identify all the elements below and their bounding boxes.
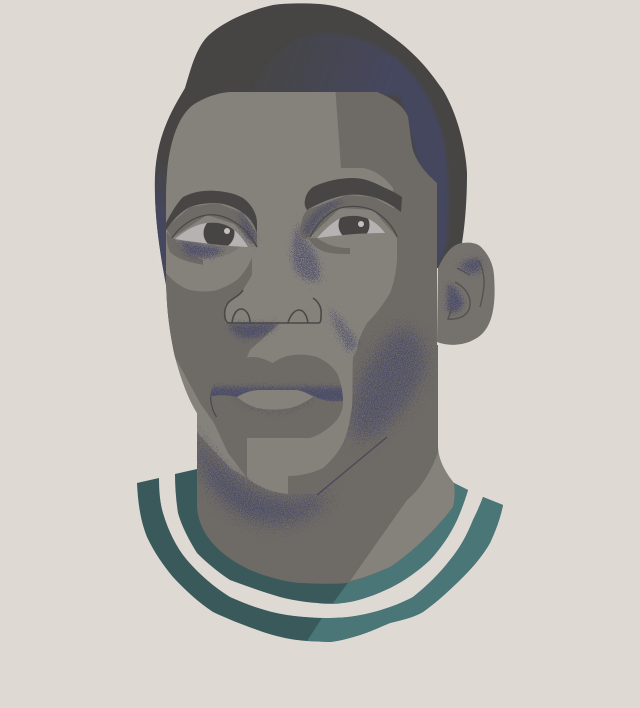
collar: outer band bbox=[137, 478, 503, 642]
hair: blue sheen top bbox=[290, 34, 449, 266]
hair bbox=[150, 0, 470, 300]
ear: inner grain bbox=[445, 280, 466, 316]
left eye: highlight bbox=[224, 228, 230, 234]
right eye: white bbox=[317, 216, 385, 238]
right eye bbox=[300, 178, 402, 254]
mouth opening bbox=[237, 390, 313, 410]
chin shadow grain bbox=[190, 410, 335, 529]
left eyebrow bbox=[166, 191, 257, 233]
face: shaded left cheek bbox=[160, 257, 280, 478]
left eye: lower crescent bbox=[167, 232, 203, 265]
hair: blue sheen left bbox=[154, 177, 166, 285]
face: light plane bbox=[150, 85, 397, 494]
collar: outer band lit part bbox=[307, 497, 503, 642]
right eyebrow bbox=[305, 178, 402, 212]
neck bbox=[197, 330, 455, 584]
nostril left bbox=[232, 309, 250, 323]
nose bbox=[225, 290, 321, 323]
upper lip shadow grain bbox=[200, 386, 350, 404]
right eye: lid shadow bbox=[300, 195, 401, 240]
left eye: lid shadow bbox=[166, 203, 257, 248]
mouth opening shadow bbox=[233, 396, 317, 412]
left eye: lid grain bbox=[232, 208, 258, 248]
collar: inner band lit part bbox=[333, 483, 468, 603]
lip left line bbox=[210, 397, 216, 417]
left eye bbox=[166, 191, 258, 265]
right eye: lower crescent bbox=[308, 238, 350, 254]
face: cheek shadow grain bbox=[328, 302, 362, 356]
lips shape bbox=[210, 355, 343, 438]
face bbox=[166, 92, 438, 500]
left eye: under-eye grain bbox=[176, 238, 228, 259]
jaw line bbox=[317, 437, 387, 495]
lips and chin bbox=[200, 355, 350, 438]
face: nose shadow grain bbox=[226, 322, 282, 340]
portrait illustration bbox=[137, 3, 503, 642]
face: right cheek shadow grain bbox=[345, 320, 432, 446]
left eye: iris bbox=[204, 222, 234, 246]
right eye: highlight bbox=[358, 221, 364, 227]
collar: inner band bbox=[175, 469, 468, 604]
right eye: lid grain bbox=[300, 198, 348, 238]
ear: lines bbox=[436, 260, 484, 343]
right eye: iris bbox=[338, 216, 370, 236]
left eye: lid line bbox=[172, 215, 257, 247]
ear bbox=[436, 243, 495, 345]
right eye: lid line bbox=[310, 206, 397, 237]
left eye: under-eye plane bbox=[175, 239, 240, 259]
nostril right bbox=[288, 310, 308, 323]
face: eye socket shadow grain bbox=[290, 218, 322, 283]
neck: lit side bbox=[350, 445, 455, 581]
left eye: white bbox=[175, 223, 248, 247]
ear: top grain bbox=[456, 256, 484, 276]
